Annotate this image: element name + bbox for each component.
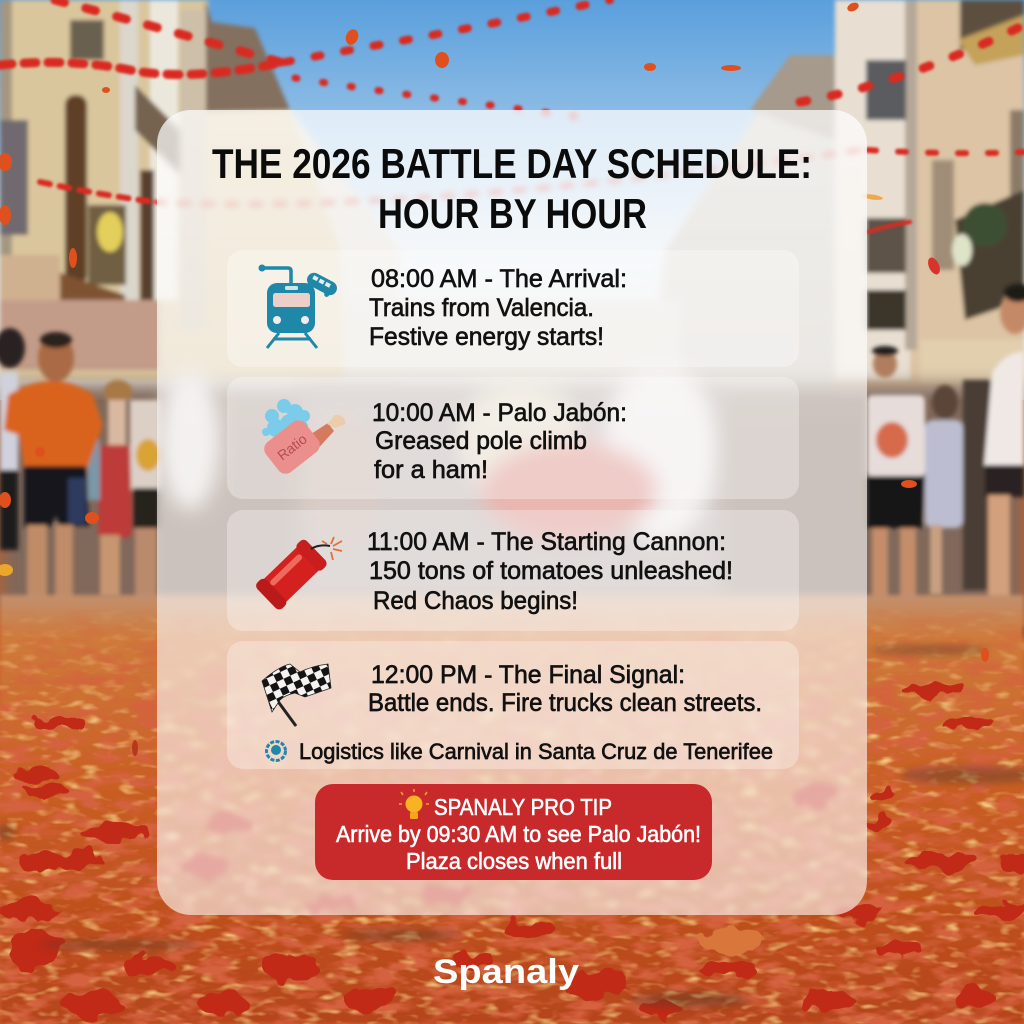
icon: checkered flag bbox=[262, 664, 331, 726]
people left bbox=[0, 328, 160, 624]
11:00 text: Red Chaos begins! bbox=[373, 587, 578, 615]
title: THE 2026 BATTLE DAY SCHEDULE: bbox=[212, 140, 812, 187]
shadow patches on ground bbox=[0, 645, 1024, 1008]
pennant garlands bbox=[0, 0, 1024, 232]
callout: pro tip: Plaza closes when full bbox=[406, 848, 622, 874]
sky bbox=[0, 0, 1024, 400]
distant buildings bbox=[290, 110, 840, 400]
panel: 11:00 card bbox=[227, 510, 799, 631]
people right bbox=[867, 284, 1024, 641]
10:00 text: for a ham! bbox=[374, 456, 488, 484]
logistics note: Logistics like Carnival in Santa Cruz de Tenerifee bbox=[299, 739, 773, 764]
panel: 08:00 card bbox=[227, 250, 799, 367]
icon: soap and ham: Ratio bbox=[274, 431, 310, 463]
title bbox=[212, 140, 812, 237]
brand logo: Spanaly bbox=[433, 953, 579, 991]
callout: pro tip bbox=[315, 784, 712, 880]
icon: red firework cannon bbox=[254, 537, 342, 612]
right buildings bbox=[750, 0, 1024, 390]
08:00 text: Trains from Valencia. bbox=[369, 294, 594, 322]
08:00 text: 08:00 AM - The Arrival: bbox=[371, 265, 627, 293]
confetti tomato pieces bbox=[0, 1, 989, 756]
12:00 text: 12:00 PM - The Final Signal: bbox=[371, 661, 685, 689]
tomato-covered ground bbox=[0, 595, 1024, 1024]
icon: logistics gear bbox=[266, 742, 286, 760]
tomato chunks bbox=[0, 684, 1024, 1019]
title: HOUR BY HOUR bbox=[378, 190, 647, 237]
callout: pro tip: SPANALY PRO TIP bbox=[434, 794, 612, 820]
left buildings bbox=[0, 0, 345, 380]
11:00 text bbox=[367, 528, 733, 615]
11:00 text: 150 tons of tomatoes unleashed! bbox=[369, 557, 733, 585]
panel: 12:00 card bbox=[227, 641, 799, 769]
icon: train bbox=[258, 264, 339, 348]
10:00 text: Greased pole climb bbox=[375, 427, 587, 455]
panel: frosted schedule panel bbox=[157, 110, 867, 915]
icon: soap and ham bbox=[261, 399, 346, 477]
08:00 text: Festive energy starts! bbox=[369, 323, 604, 351]
panel: 10:00 card bbox=[227, 377, 799, 499]
callout: pro tip: Arrive by 09:30 AM to see Palo Jabón! bbox=[336, 821, 701, 847]
10:00 text: 10:00 AM - Palo Jabón: bbox=[372, 399, 627, 427]
icon: light bulb bbox=[399, 789, 429, 819]
12:00 text: Battle ends. Fire trucks clean streets. bbox=[368, 689, 762, 717]
10:00 text bbox=[372, 399, 627, 484]
08:00 text bbox=[369, 265, 627, 351]
11:00 text: 11:00 AM - The Starting Cannon: bbox=[367, 528, 726, 556]
12:00 text bbox=[368, 661, 762, 717]
crowd backdrop bbox=[0, 385, 1024, 610]
